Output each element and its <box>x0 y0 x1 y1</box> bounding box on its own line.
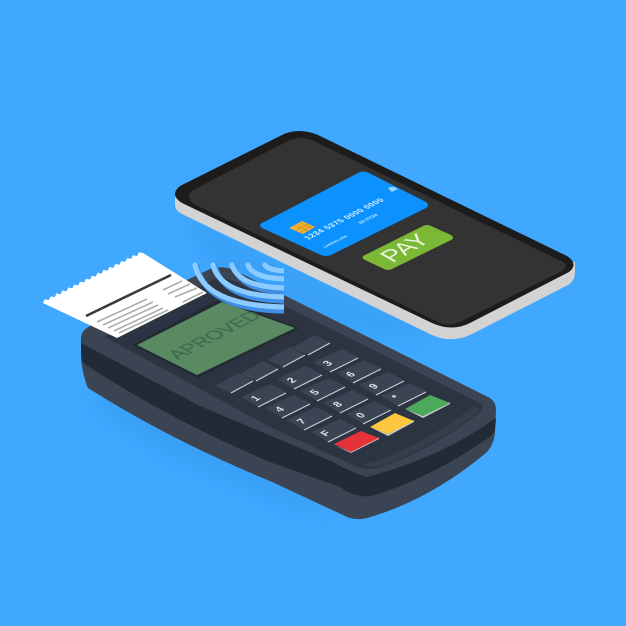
key 2 <box>277 366 322 389</box>
key 3: 3 <box>320 359 336 368</box>
wave shadows <box>197 266 290 311</box>
shadow: terminal <box>90 385 345 515</box>
keypad <box>215 335 450 453</box>
key 2: 2 <box>284 376 300 385</box>
terminal dark band <box>81 343 496 496</box>
key 7: 7 <box>294 417 310 426</box>
key 4 <box>265 395 310 418</box>
phone <box>175 131 575 339</box>
key 7 <box>287 407 332 430</box>
card holder: CARDHOLDER <box>322 235 349 248</box>
receipt <box>43 252 207 338</box>
phone body <box>175 131 574 328</box>
key 1 <box>241 384 286 407</box>
pay label: PAY <box>374 230 437 266</box>
function keys <box>215 335 330 393</box>
receipt text lines <box>97 281 203 333</box>
key 9 <box>359 372 404 395</box>
key 6: 6 <box>343 370 359 379</box>
key F: F <box>318 429 334 438</box>
card expiry: 00 07/24 <box>357 213 380 225</box>
contactless waves <box>195 265 290 311</box>
receipt heading bar <box>86 275 171 316</box>
screen bezel <box>132 299 300 378</box>
lcd screen <box>137 302 295 375</box>
red button <box>334 431 379 453</box>
shadow: phone <box>185 215 440 340</box>
key 1: 1 <box>248 394 264 403</box>
key 5 <box>300 378 345 401</box>
key star: * <box>389 393 404 402</box>
key F <box>311 419 356 442</box>
panel strip <box>362 406 481 467</box>
key 0: 0 <box>353 411 369 420</box>
key 5: 5 <box>307 388 323 397</box>
pay button <box>362 225 453 270</box>
yellow button <box>370 413 414 436</box>
approved text: APROVED <box>163 308 267 362</box>
wave arcs <box>195 265 290 307</box>
key star <box>381 383 426 406</box>
green button <box>405 395 450 418</box>
key 8: 8 <box>330 400 346 409</box>
card number: 1234 5375 0000 0000 <box>302 197 387 241</box>
function key lines <box>231 343 330 393</box>
key 4: 4 <box>272 405 288 414</box>
key 0 <box>346 401 391 424</box>
key 8 <box>323 390 368 413</box>
key 9: 9 <box>366 382 382 391</box>
phone screen <box>189 138 566 324</box>
key 3 <box>313 349 358 372</box>
payment terminal <box>81 267 496 519</box>
terminal body <box>81 267 496 519</box>
card chip <box>289 221 315 234</box>
phone side edge <box>175 197 575 339</box>
key 6 <box>336 360 381 383</box>
card contactless icon <box>388 187 398 192</box>
terminal inner panel <box>105 278 482 469</box>
credit card <box>260 172 428 256</box>
